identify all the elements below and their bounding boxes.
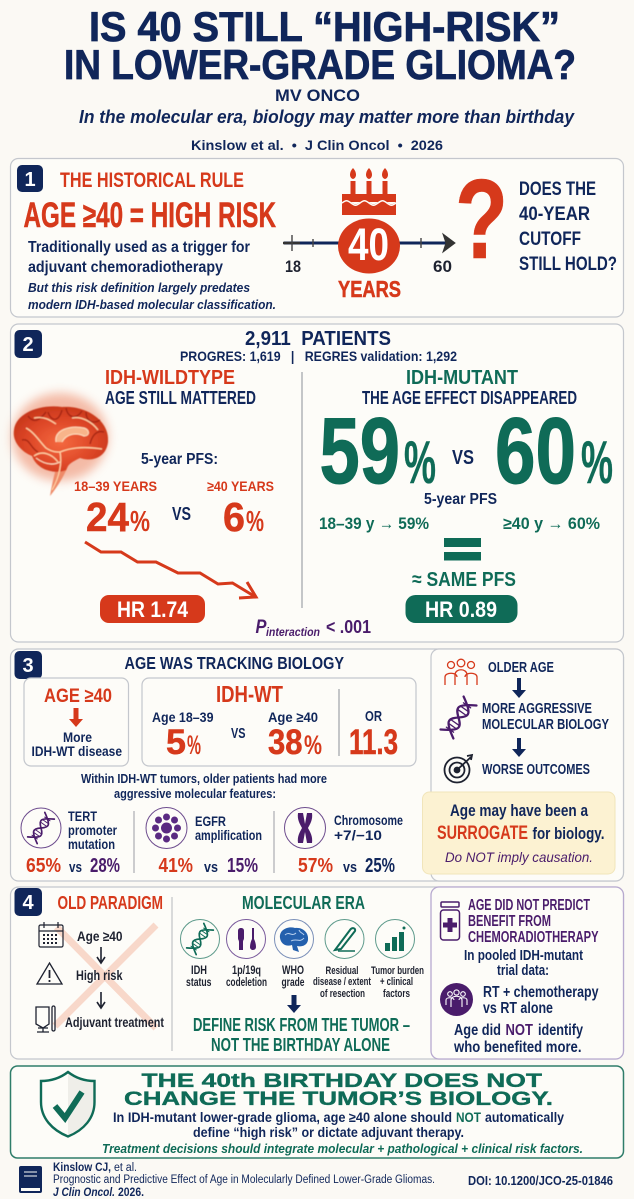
factor: IDH status <box>180 920 220 989</box>
box: IDH-WT prevalence: 5 <box>166 723 186 762</box>
box: IDH-WT prevalence: Age ≥40 <box>268 709 318 725</box>
feature: EGFR: 15% <box>227 855 258 877</box>
stat: 59 percent: 59 <box>320 398 400 503</box>
conclusion text <box>193 1015 410 1055</box>
molecular features intro: aggressive molecular features: <box>114 786 276 801</box>
takeaway body: In IDH-mutant lower-grade glioma, age ≥40 alone should <box>113 1110 452 1125</box>
feature: EGFR <box>146 808 262 877</box>
body text: adjuvant chemoradiotherapy <box>28 259 223 276</box>
factor: WHO grade <box>274 920 314 989</box>
reference text <box>53 1162 435 1199</box>
stat: age 40 or older: ≥40 YEARS <box>207 478 274 494</box>
takeaway body <box>113 1110 564 1140</box>
age timeline <box>283 234 455 276</box>
callout: surrogate <box>422 792 615 874</box>
heading: BENEFIT FROM <box>468 913 551 930</box>
feature: chromosome: 57% <box>298 855 333 877</box>
box: IDH-WT prevalence: 38 <box>268 723 302 762</box>
box: age 40 leads to IDH-WT: AGE ≥40 <box>44 685 112 707</box>
panel 1: the historical rule <box>10 156 624 317</box>
aggressive biology text: MORE AGGRESSIVE <box>482 701 592 717</box>
factor: tumor burden: Tumor burden <box>371 965 424 977</box>
heading <box>468 897 599 946</box>
conclusion text: NOT THE BIRTHDAY ALONE <box>211 1035 390 1055</box>
regimen text <box>483 984 599 1017</box>
age timeline: 60 <box>433 257 452 276</box>
age timeline: 18 <box>285 257 301 276</box>
subpanel: IDH-mutant <box>319 366 613 623</box>
icon: DNA <box>441 696 476 739</box>
stat: 18-39 years <box>74 478 157 540</box>
stat: 18-39 years: 18–39 YEARS <box>74 478 157 494</box>
subtitle: In the molecular era, biology may matter more than birthday <box>79 107 575 127</box>
label: 5-year PFS: 5-year PFS: <box>141 451 218 468</box>
40 badge: 40 <box>348 219 389 270</box>
icon: birthday cake <box>342 168 396 215</box>
stat: 18-39 years: 24 <box>86 494 129 540</box>
reference text: Prognostic and Predictive Effect of Age in Molecularly Defined Lower-Grade Gliomas. <box>53 1174 435 1186</box>
header <box>64 3 576 153</box>
callout: surrogate: Do NOT imply causation. <box>445 849 593 865</box>
years label: YEARS <box>338 276 401 302</box>
box: IDH-WT prevalence: 11.3 <box>349 723 398 762</box>
subpanel: causal pathway: OLDER AGE <box>488 660 554 676</box>
reference text: et al. <box>114 1162 137 1174</box>
molecular era column <box>180 892 424 1055</box>
icon: vial <box>440 902 460 940</box>
molecular features intro <box>81 771 327 801</box>
badge 3 <box>14 651 42 679</box>
feature: EGFR: vs <box>204 859 218 876</box>
stat: age 40 or older: 6 <box>223 494 245 540</box>
box: IDH-WT prevalence <box>142 678 416 766</box>
panel 3: age was tracking biology <box>10 649 624 881</box>
feature: TERT: promoter <box>68 823 118 838</box>
regimen text: RT + chemotherapy <box>483 984 599 1001</box>
vs: VS <box>172 504 191 524</box>
box: age 40 leads to IDH-WT <box>24 678 128 766</box>
vs: VS <box>452 447 474 469</box>
takeaway body: NOT <box>456 1110 482 1125</box>
cutoff question <box>519 179 617 275</box>
arrow down <box>512 678 526 698</box>
icon: question mark: ? <box>455 156 508 282</box>
feature: chromosome: Chromosome <box>334 813 403 828</box>
heading: IDH-mutant <box>362 366 577 408</box>
feature: TERT: TERT <box>68 809 98 824</box>
italic note: modern IDH-based molecular classification. <box>28 298 276 312</box>
subpanel: IDH-wildtype <box>74 366 274 623</box>
icon: people <box>445 659 477 685</box>
author label: MV ONCO <box>275 86 360 105</box>
italic note <box>28 281 276 312</box>
factor: WHO grade: WHO <box>282 965 304 977</box>
heading: IDH-wildtype: AGE STILL MATTERED <box>105 388 256 408</box>
old paradigm column: High risk <box>76 967 123 983</box>
factor: tumor burden: factors <box>383 988 410 1000</box>
footer: reference <box>19 1162 613 1199</box>
heading: IDH-mutant: IDH-MUTANT <box>406 366 518 389</box>
factor: residual disease: Residual <box>326 965 358 977</box>
panel 4: paradigm shift <box>10 887 624 1059</box>
icon: shield with check <box>41 1072 94 1136</box>
factor: 1p/19q codeletion: codeletion <box>226 977 267 989</box>
p interaction: P <box>256 617 267 638</box>
factor: 1p/19q codeletion: 1p/19q <box>232 965 261 977</box>
same PFS label: ≈ SAME PFS <box>412 568 516 591</box>
takeaway heading: CHANGE THE TUMOR’S BIOLOGY. <box>124 1089 553 1110</box>
box: IDH-WT prevalence: % <box>187 730 201 760</box>
age finding text: identify <box>538 1022 583 1039</box>
title <box>64 3 576 88</box>
box: IDH-WT prevalence: Age 18–39 <box>152 709 214 725</box>
aggressive biology text <box>482 701 609 733</box>
stat: age 40 or older: % <box>246 506 264 538</box>
panel: takeaway <box>10 1066 624 1158</box>
reference text: J Clin Oncol. <box>53 1187 115 1199</box>
icon: calendar <box>39 922 63 947</box>
arrow down <box>512 738 526 757</box>
callout: surrogate: for biology. <box>532 824 604 843</box>
badge 2 <box>14 330 42 358</box>
icon: glowing brain <box>12 393 108 496</box>
hazard ratio pill: HR 1.74 <box>117 597 189 622</box>
heading: patients <box>180 327 457 364</box>
crossed-out mark <box>55 925 156 1028</box>
feature: chromosome <box>284 808 403 877</box>
heading: the historical rule: THE HISTORICAL RULE <box>60 169 244 192</box>
old paradigm column: Age ≥40 <box>77 928 123 944</box>
heading: IDH-wildtype: IDH-WILDTYPE <box>105 366 235 389</box>
stat: 18-39 years: % <box>130 506 150 538</box>
feature: TERT: vs <box>69 859 82 876</box>
icon: patients group <box>440 983 473 1016</box>
heading: molecular era: MOLECULAR ERA <box>242 892 365 913</box>
title: IS 40 STILL “HIGH-RISK” <box>89 3 560 50</box>
cutoff question: CUTOFF <box>519 229 581 250</box>
icon: book <box>19 1166 42 1193</box>
stat: age 40 or older <box>207 478 274 540</box>
feature: EGFR: 41% <box>158 855 193 877</box>
italic note: But this risk definition largely predates <box>28 281 250 295</box>
title: IN LOWER-GRADE GLIOMA? <box>64 41 576 88</box>
factor: 1p/19q codeletion <box>226 920 267 989</box>
label: 5-year PFS: 5-year PFS <box>424 491 497 508</box>
heading: old paradigm: OLD PARADIGM <box>58 892 163 913</box>
factor: tumor burden: + clinical <box>380 976 413 988</box>
molecular features intro: Within IDH-WT tumors, older patients had more <box>81 771 327 786</box>
trial data text: In pooled IDH-mutant <box>464 948 583 964</box>
p interaction <box>256 617 371 639</box>
old paradigm column <box>36 892 164 1032</box>
cutoff question: DOES THE <box>519 179 596 200</box>
age group results: 18–39 y → 59% <box>319 515 429 533</box>
hazard ratio pill: HR 0.89 <box>425 597 497 622</box>
age group results: ≥40 y → 60% <box>503 515 600 533</box>
factor: IDH status: IDH <box>191 965 207 977</box>
trial data text <box>464 948 583 979</box>
conclusion text: DEFINE RISK FROM THE TUMOR – <box>193 1015 410 1035</box>
icon: DNA <box>21 808 61 848</box>
headline rule: AGE ≥40 = HIGH RISK <box>24 196 276 235</box>
callout: surrogate: Age may have been a <box>450 801 588 820</box>
cutoff question: 40-YEAR <box>519 204 590 225</box>
feature: TERT: 65% <box>26 855 61 877</box>
takeaway body: define “high risk” or dictate adjuvant therapy. <box>193 1125 464 1140</box>
badge 4 <box>14 888 42 916</box>
subpanel: causal pathway <box>441 659 609 782</box>
factor: IDH status: status <box>186 977 212 989</box>
stat: 59 percent: % <box>404 429 436 496</box>
takeaway note: Treatment decisions should integrate molecular + pathological + clinical risk factors. <box>102 1142 583 1156</box>
badge 2: 2 <box>22 334 34 356</box>
callout: surrogate: SURROGATE <box>437 823 528 844</box>
stat: 60 percent: % <box>581 429 613 496</box>
p interaction: < .001 <box>326 617 371 637</box>
p interaction: interaction <box>266 625 320 639</box>
heading: patients: PROGRES: 1,619 | REGRES validation: 1,292 <box>180 348 457 364</box>
factor: residual disease <box>313 920 371 1000</box>
age finding text <box>453 1022 583 1056</box>
old paradigm column: Adjuvant treatment <box>65 1015 164 1030</box>
heading: AGE WAS TRACKING BIOLOGY <box>124 653 344 673</box>
box: IDH-WT prevalence: IDH-WT <box>216 681 283 707</box>
icon: chromosome <box>284 808 326 848</box>
icon: IV bag <box>36 1006 55 1032</box>
panel 2: patients and PFS <box>10 324 624 642</box>
reference text: 2026. <box>118 1187 144 1199</box>
factor: residual disease: disease / extent <box>313 976 371 988</box>
age group results <box>319 515 600 533</box>
heading: patients: 2,911 PATIENTS <box>245 327 391 350</box>
worse outcomes: WORSE OUTCOMES <box>482 762 590 778</box>
age finding text: Age did <box>454 1022 501 1039</box>
feature: TERT: mutation <box>68 837 115 852</box>
badge 1: 1 <box>24 169 36 191</box>
feature: EGFR: EGFR <box>195 814 226 829</box>
heading: IDH-wildtype <box>105 366 256 408</box>
arrow down <box>97 947 105 963</box>
box: IDH-WT prevalence: % <box>304 730 322 760</box>
box: age 40 leads to IDH-WT: More <box>63 729 92 745</box>
takeaway body: automatically <box>485 1110 564 1125</box>
regimen text: vs RT alone <box>483 1000 553 1017</box>
DOI: DOI: 10.1200/JCO-25-01846 <box>468 1174 613 1188</box>
reference text: Kinslow CJ, <box>53 1162 111 1174</box>
badge 1 <box>17 165 43 192</box>
subpanel: chemoradiotherapy benefit <box>431 887 624 1059</box>
feature: chromosome: 25% <box>365 855 395 877</box>
badge 4: 4 <box>22 892 34 914</box>
feature: chromosome: vs <box>343 859 357 876</box>
arrow down <box>97 992 105 1008</box>
feature: TERT <box>21 808 120 877</box>
takeaway heading: THE 40th BIRTHDAY DOES NOT <box>142 1071 543 1092</box>
takeaway heading <box>124 1071 553 1110</box>
feature: chromosome: +7/−10 <box>334 828 382 843</box>
box: age 40 leads to IDH-WT: IDH-WT disease <box>32 743 122 759</box>
feature: TERT: 28% <box>90 855 120 877</box>
hazard ratio pill <box>406 595 518 623</box>
body text <box>28 239 250 276</box>
feature: EGFR: amplification <box>195 828 262 843</box>
icon: equals sign <box>444 538 481 560</box>
factor: residual disease: of resection <box>320 988 365 1000</box>
arrow down <box>287 995 301 1013</box>
trial data text: trial data: <box>497 963 549 979</box>
badge 3: 3 <box>22 655 34 677</box>
icon: target <box>444 755 472 782</box>
factor: tumor burden <box>371 920 424 1000</box>
icon: EGFR cluster <box>146 808 187 848</box>
age finding text: NOT <box>506 1022 533 1039</box>
body text: Traditionally used as a trigger for <box>28 239 250 256</box>
hazard ratio pill <box>100 595 205 623</box>
citation line: Kinslow et al. • J Clin Oncol • 2026 <box>191 137 443 153</box>
stat: 60 percent: 60 <box>495 398 576 503</box>
box: IDH-WT prevalence: OR <box>365 709 382 725</box>
age finding text: who benefited more. <box>453 1039 582 1056</box>
arrow: declining survival <box>85 542 256 598</box>
box: IDH-WT prevalence: VS <box>231 726 246 742</box>
factor: WHO grade: grade <box>282 977 304 989</box>
icon: warning <box>37 963 62 984</box>
